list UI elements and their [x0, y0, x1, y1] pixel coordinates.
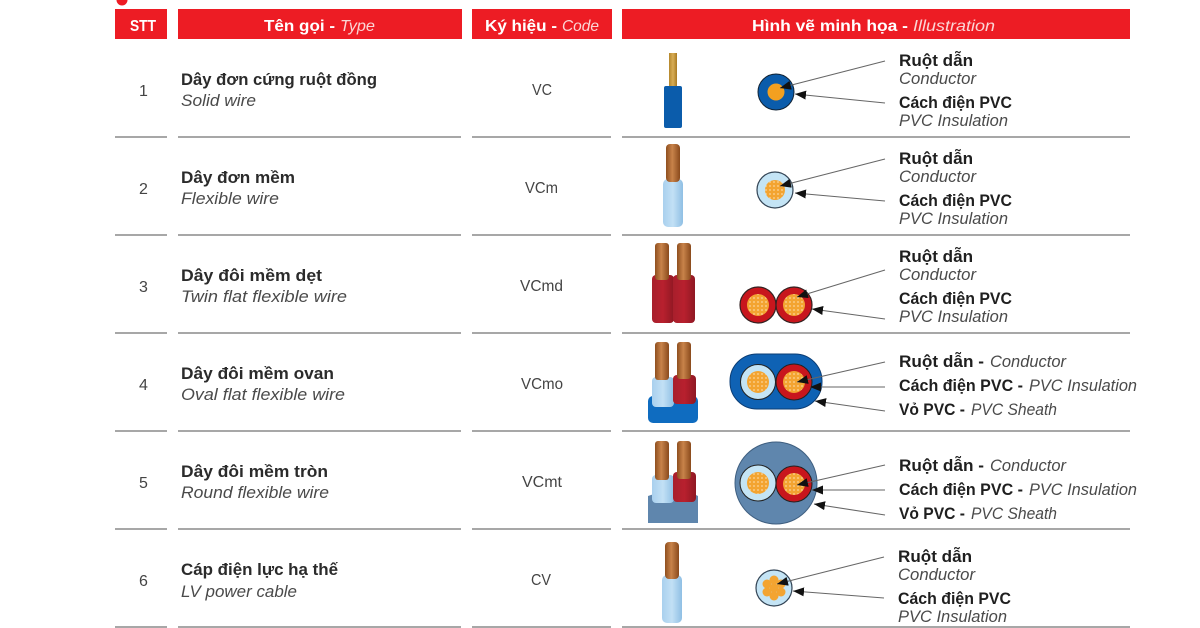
labels: LV cable: Ruột dẫn: [898, 547, 972, 566]
name: solid wire: [181, 70, 377, 110]
row 6: LV power cable: 6: [139, 573, 148, 590]
arrows: flexible wire: [780, 159, 885, 201]
row 3: twin flat flexible wire: 3: [139, 279, 148, 296]
row 1: solid wire: 1: [139, 83, 148, 100]
row 5: round flexible wire: [115, 441, 1137, 529]
name: LV power cable: [181, 560, 339, 601]
icon: oval flat cross section: [730, 354, 822, 409]
row 3: twin flat flexible wire: [115, 243, 1130, 333]
name: LV power cable: Cáp điện lực hạ thế: [181, 560, 339, 579]
name: solid wire: Solid wire: [181, 91, 256, 110]
icon: twin flat cross section: [740, 287, 812, 323]
name: flexible wire: Flexible wire: [181, 189, 279, 208]
labels: twin flat: Ruột dẫn: [899, 247, 973, 266]
labels: solid wire: PVC Insulation: [899, 111, 1008, 130]
icon: round flexible side view: [648, 441, 698, 523]
table header: [115, 9, 1130, 39]
icon: round flexible cross section: [735, 442, 817, 524]
name: solid wire: Dây đơn cứng ruột đồng: [181, 70, 377, 89]
labels: solid wire: Conductor: [899, 69, 977, 88]
labels: twin flat: PVC Insulation: [899, 307, 1008, 326]
code: VCm: VCm: [525, 180, 558, 197]
header: STT: STT: [130, 18, 156, 35]
header: type: Tên gọi -: [264, 18, 335, 35]
name: flexible wire: Dây đơn mềm: [181, 168, 295, 187]
header: STT: [115, 9, 167, 39]
icon: solid wire side view: [664, 53, 682, 128]
header: illustration: Hình vẽ minh họa -: [752, 18, 908, 35]
header: code: [472, 9, 612, 39]
name: oval flat: Dây đôi mềm ovan: [181, 364, 334, 383]
name: twin flat: Dây đôi mềm dẹt: [181, 266, 322, 285]
arrows: LV cable: [777, 557, 884, 598]
arrows: round flexible: [797, 465, 885, 515]
icon: flexible wire side view: [663, 144, 683, 227]
labels: twin flat: [899, 247, 1012, 326]
code: VC: VC: [532, 82, 552, 99]
name: twin flat: [181, 266, 347, 306]
arrows: solid wire: [780, 61, 885, 103]
arrows: oval flat: [797, 362, 885, 411]
labels: round flexible: Vỏ PVC -: [899, 504, 965, 523]
row 1: solid wire: [115, 51, 1130, 137]
labels: oval flat: Conductor: [990, 352, 1067, 371]
labels: round flexible: [899, 456, 1137, 523]
header: code: Ký hiệu -: [485, 18, 557, 35]
labels: LV cable: PVC Insulation: [898, 607, 1007, 626]
labels: LV cable: Conductor: [898, 565, 976, 584]
icon: twin flat side view: [652, 243, 695, 323]
red marker dot: [116, 0, 128, 6]
header: code: Code: [562, 18, 599, 35]
labels: solid wire: Ruột dẫn: [899, 51, 973, 70]
name: oval flat: Oval flat flexible wire: [181, 385, 345, 404]
labels: oval flat: Ruột dẫn -: [899, 352, 984, 371]
icon: solid wire cross section: [758, 74, 794, 110]
labels: LV cable: Cách điện PVC: [898, 589, 1011, 608]
icon: LV cable cross section: [756, 570, 792, 606]
name: LV power cable: LV power cable: [181, 582, 297, 601]
code: VCmo: VCmo: [521, 376, 563, 393]
labels: twin flat: Conductor: [899, 265, 977, 284]
name: twin flat: Twin flat flexible wire: [181, 287, 347, 306]
header: illustration: Illustration: [913, 18, 995, 35]
row 2: flexible wire: 2: [139, 181, 148, 198]
code: CV: CV: [531, 572, 551, 589]
labels: twin flat: Cách điện PVC: [899, 289, 1012, 308]
labels: round flexible: Ruột dẫn -: [899, 456, 984, 475]
labels: flexible wire: PVC Insulation: [899, 209, 1008, 228]
labels: solid wire: Cách điện PVC: [899, 93, 1012, 112]
name: round flexible: Round flexible wire: [181, 483, 329, 502]
row 2: flexible wire: [115, 144, 1130, 235]
labels: LV cable: [898, 547, 1011, 626]
labels: oval flat: [899, 352, 1137, 419]
row 6: LV power cable: [115, 542, 1130, 627]
labels: oval flat: Cách điện PVC -: [899, 376, 1023, 395]
labels: flexible wire: [899, 149, 1012, 228]
code: VCmd: VCmd: [520, 278, 563, 295]
icon: flexible wire cross section: [757, 172, 793, 208]
code: VCmt: VCmt: [522, 474, 563, 491]
header: type: Type: [340, 18, 375, 35]
header: type: [178, 9, 462, 39]
row 4: oval flat flexible wire: [115, 342, 1137, 431]
labels: round flexible: Conductor: [990, 456, 1067, 475]
labels: oval flat: Vỏ PVC -: [899, 400, 965, 419]
labels: flexible wire: Ruột dẫn: [899, 149, 973, 168]
labels: round flexible: PVC Sheath: [971, 504, 1057, 523]
labels: solid wire: [899, 51, 1012, 130]
name: round flexible: [181, 462, 329, 502]
icon: oval flat side view: [648, 342, 698, 423]
name: flexible wire: [181, 168, 295, 208]
labels: flexible wire: Cách điện PVC: [899, 191, 1012, 210]
labels: round flexible: PVC Insulation: [1029, 480, 1137, 499]
labels: flexible wire: Conductor: [899, 167, 977, 186]
row 4: oval flat flexible wire: 4: [139, 377, 148, 394]
labels: round flexible: Cách điện PVC -: [899, 480, 1023, 499]
name: round flexible: Dây đôi mềm tròn: [181, 462, 328, 481]
labels: oval flat: PVC Insulation: [1029, 376, 1137, 395]
icon: LV cable side view: [662, 542, 682, 623]
row 5: round flexible wire: 5: [139, 475, 148, 492]
header: illustration: [622, 9, 1130, 39]
name: oval flat: [181, 364, 345, 404]
arrows: twin flat: [797, 270, 885, 319]
labels: oval flat: PVC Sheath: [971, 400, 1057, 419]
